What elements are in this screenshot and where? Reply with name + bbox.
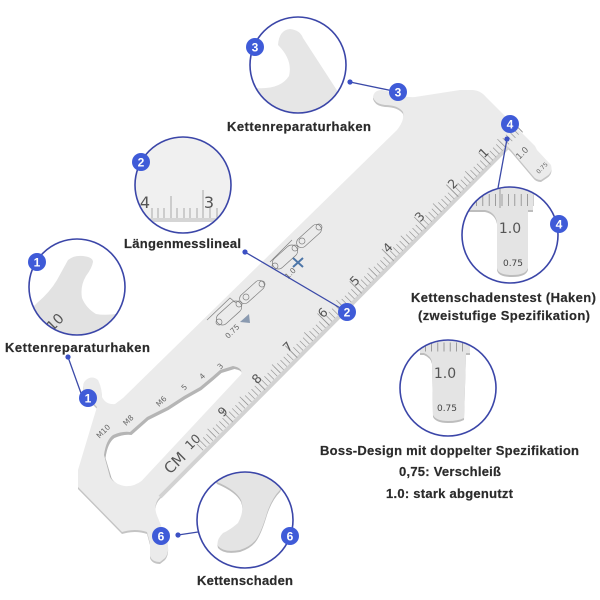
ruler numbers: 6 bbox=[315, 304, 331, 321]
callout 5: double specification detail bbox=[400, 335, 496, 436]
on-tool badge 4 bbox=[501, 115, 519, 133]
chain gauge 0.75 icon bbox=[207, 278, 266, 340]
label: Längenmesslineal: Längenmesslineal bbox=[124, 236, 241, 251]
on-tool badge 6: 6 bbox=[158, 530, 165, 544]
callout 3: hook detail: 3 bbox=[252, 40, 259, 54]
on-tool badge 3: 3 bbox=[395, 86, 402, 100]
ruler edge bevel bbox=[160, 147, 508, 497]
callout 6: chain damage hook detail bbox=[197, 470, 299, 568]
on-tool badge 4: 4 bbox=[507, 118, 514, 132]
on-tool badge 2: 2 bbox=[344, 306, 351, 320]
label: zweistufige Spezifikation: (zweistufige Spezifikation) bbox=[418, 308, 590, 323]
callout 1: hook detail bbox=[28, 239, 125, 345]
callout 4: gauge detail: 4 bbox=[556, 218, 563, 232]
callout 2: ruler detail: 2 bbox=[138, 156, 145, 170]
wrench size labels: 3 bbox=[215, 361, 225, 371]
hook gauge labels: 0.75 bbox=[535, 161, 550, 176]
label: Boss-Design: Boss-Design mit doppelter Spezifikation bbox=[320, 443, 579, 458]
on-tool badge 2 bbox=[338, 303, 356, 321]
hook gauge labels: 1.0 bbox=[514, 145, 531, 162]
label: 1.0 stark abgenutzt: 1.0: stark abgenutzt bbox=[386, 486, 514, 501]
ruler ticks bbox=[195, 126, 519, 450]
connector lines bbox=[65, 79, 510, 538]
wrench slot bbox=[104, 366, 242, 486]
on-tool badge 6 bbox=[152, 527, 170, 545]
label: Kettenreparaturhaken top: Kettenreparaturhaken bbox=[227, 119, 371, 134]
callout 5: double specification detail: 0.75 bbox=[437, 404, 457, 414]
ruler numbers: 8 bbox=[249, 370, 265, 387]
callout 1: hook detail: 10 bbox=[44, 311, 68, 335]
callout 4: gauge detail bbox=[462, 185, 568, 283]
ruler numbers: 7 bbox=[280, 339, 296, 355]
ruler numbers: 5 bbox=[347, 273, 363, 289]
ruler numbers: 10 bbox=[182, 431, 204, 453]
label: Kettenreparaturhaken left: Kettenreparaturhaken bbox=[5, 340, 150, 355]
callout 4: gauge detail: 1.0 bbox=[499, 221, 521, 237]
chain gauge 1.0 icon bbox=[270, 222, 323, 281]
ruler numbers: 9 bbox=[215, 403, 231, 420]
callout 4: gauge detail: 0.75 bbox=[503, 259, 523, 269]
wrench size labels: M6 bbox=[154, 394, 169, 409]
callout 1: hook detail: 1 bbox=[34, 256, 41, 270]
hook gauge labels bbox=[514, 145, 550, 176]
callout 5: double specification detail: 1.0 bbox=[434, 366, 456, 382]
label: 0,75 Verschleiß: 0,75: Verschleiß bbox=[399, 464, 501, 479]
wrench size labels: 4 bbox=[197, 371, 207, 381]
callout 3: hook detail bbox=[246, 17, 346, 120]
on-tool badge 1 bbox=[79, 389, 97, 407]
ruler numbers: 2 bbox=[445, 176, 461, 192]
ruler numbers: 4 bbox=[380, 239, 396, 256]
label: Kettenschaden: Kettenschaden bbox=[197, 573, 293, 588]
chain gauge 1.0 icon: 1.0 bbox=[283, 266, 298, 281]
callout 6: chain damage hook detail: 6 bbox=[287, 530, 294, 544]
on-tool badge 3 bbox=[389, 83, 407, 101]
multi-tool body bbox=[78, 90, 552, 564]
wrench size labels: M8 bbox=[121, 413, 136, 428]
ruler numbers: CM bbox=[160, 448, 190, 478]
label: Kettenschadenstest: Kettenschadenstest (Haken) bbox=[411, 290, 596, 305]
ruler numbers: 1 bbox=[476, 145, 492, 161]
chain gauge 0.75 icon: 0.75 bbox=[223, 322, 242, 340]
ruler numbers bbox=[160, 145, 492, 478]
callout 2: ruler detail: 4 bbox=[140, 193, 150, 212]
on-tool badge 1: 1 bbox=[85, 392, 92, 406]
callout 2: ruler detail bbox=[132, 136, 232, 234]
wrench size labels: 5 bbox=[179, 382, 189, 392]
ruler numbers: 3 bbox=[412, 209, 428, 225]
wrench size labels bbox=[95, 361, 225, 440]
wrench size labels: M10 bbox=[95, 422, 112, 440]
callout 2: ruler detail: 3 bbox=[204, 193, 214, 212]
